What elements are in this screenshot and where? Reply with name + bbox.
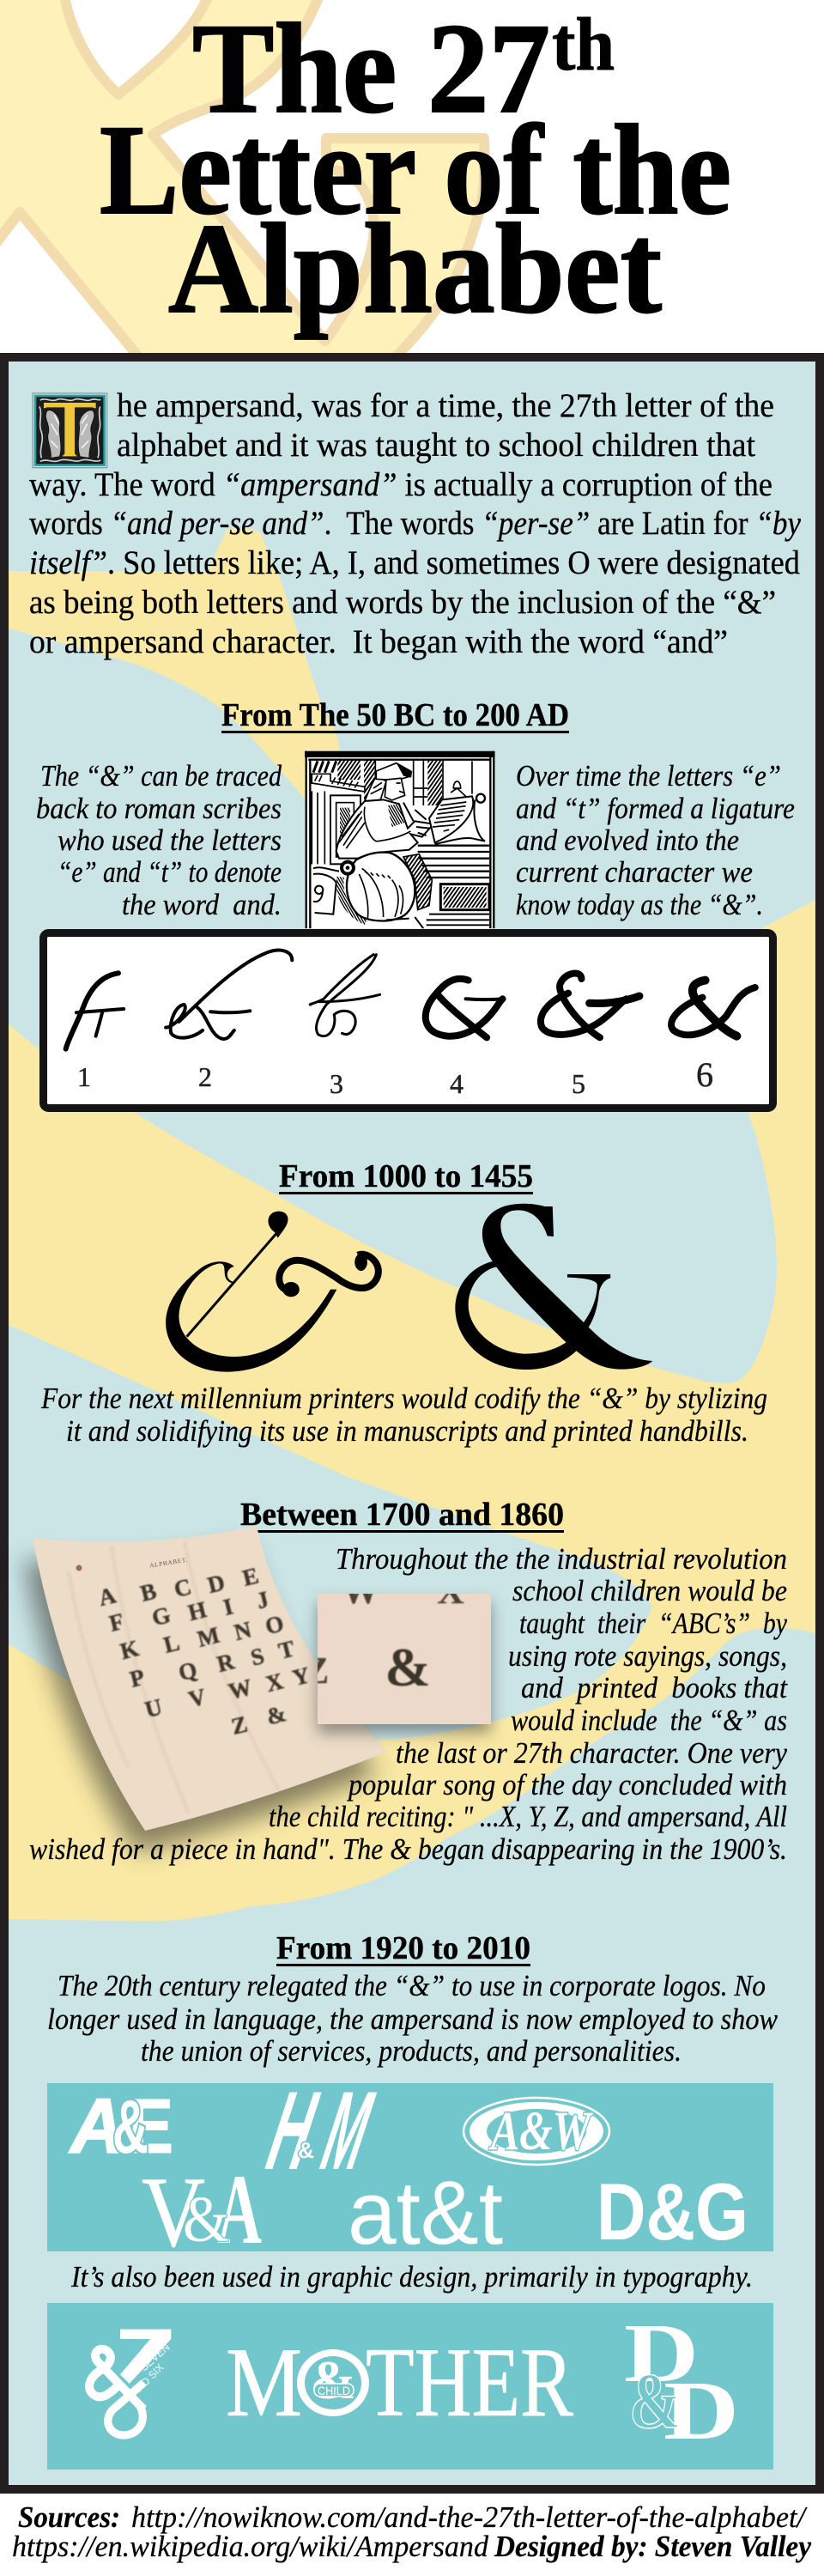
alphabet letters: E	[239, 1563, 261, 1591]
alphabet letters: S	[248, 1643, 267, 1671]
logo: Mother & Child: CHILD	[318, 2384, 350, 2397]
text: corporate logos: longer used in language, the ampersand is now employed to show	[47, 2002, 779, 2036]
glyph 4	[426, 979, 504, 1037]
alphabet letters: X	[264, 1668, 286, 1697]
text: ligature: and “t” formed a ligature	[516, 792, 795, 825]
intro paragraph: words “and per-se and”. The words “per-se” are Latin for “by	[29, 505, 802, 542]
glyph 2	[166, 951, 292, 1039]
title: th	[552, 3, 615, 87]
glyph 6	[671, 981, 755, 1036]
sources: Sources:	[18, 2500, 120, 2534]
logo: V&A	[142, 2154, 262, 2268]
logo: A&W	[464, 2098, 609, 2165]
logo: D&D: D	[624, 2307, 699, 2399]
logo: V&A: &	[183, 2184, 229, 2256]
text: roman scribes: The “&” can be traced	[40, 759, 282, 793]
intro paragraph	[29, 387, 802, 660]
intro paragraph: alphabet and it was taught to school children that	[117, 427, 755, 464]
alphabet letters: O	[263, 1610, 287, 1639]
image: alphabet sheet	[24, 1526, 387, 1852]
panel: corporate logos	[47, 2069, 773, 2268]
text: ligature: and evolved into the	[516, 823, 739, 857]
text: graphic design: It’s also been used in graphic design, primarily in typography.	[70, 2260, 753, 2293]
text: industrial revolution: and printed books that	[521, 1671, 788, 1704]
panel: typography logos	[47, 2303, 773, 2470]
logo: seven and six: SEVEN	[138, 2341, 172, 2373]
alphabet letters: J	[254, 1586, 271, 1613]
text: industrial revolution: school children would be	[512, 1574, 787, 1607]
text: ligature: Over time the letters “e”	[516, 759, 781, 793]
heading: From 1000 to 1455: From 1000 to 1455	[279, 1158, 533, 1194]
text: corporate logos: The 20th century relegated the “&” to use in corporate logos. No	[58, 1969, 766, 2002]
logo: Mother & Child: &	[310, 2349, 356, 2410]
logo: H&M: H	[253, 2069, 333, 2193]
alphabet letters: W	[226, 1674, 255, 1704]
text: industrial revolution: the last or 27th character. One very	[396, 1736, 787, 1770]
alphabet letters: V	[186, 1683, 209, 1712]
logo: Mother & Child: THER	[366, 2328, 573, 2437]
glyph numbers: 4	[450, 1068, 464, 1099]
glyph numbers: 2	[198, 1061, 212, 1092]
image: magnified ampersand inset: Z	[304, 1649, 329, 1692]
logo: D&D: &	[629, 2357, 681, 2445]
text: industrial revolution: Throughout the the industrial revolution	[336, 1542, 787, 1576]
alphabet letters: M	[195, 1622, 222, 1652]
background ampersand behind title	[0, 0, 484, 361]
glyph numbers: 1	[77, 1061, 91, 1092]
text: industrial revolution: would include the “&” as	[511, 1704, 787, 1737]
logo: D&D	[624, 2307, 739, 2457]
alphabet letters: Z	[228, 1711, 250, 1740]
logo: at&t: at&t	[348, 2163, 503, 2263]
text: corporate logos	[47, 1969, 779, 2068]
glyph 3	[310, 955, 380, 1036]
logo: V&A: V	[142, 2157, 205, 2268]
text: industrial revolution	[29, 1542, 788, 1866]
alphabet letters: N	[232, 1616, 254, 1645]
sources: Designed by: Steven Valley	[494, 2530, 811, 2563]
image: alphabet sheet: ALPHABET.	[149, 1557, 189, 1569]
alphabet letters: H	[185, 1596, 209, 1625]
logo: H&M: M	[308, 2069, 388, 2193]
icon: ornate italic ampersand	[166, 1212, 379, 1372]
heading: Between 1700 and 1860: Between 1700 and 1860	[240, 1497, 564, 1533]
sources	[12, 2500, 811, 2563]
text: roman scribes: who used the letters	[58, 823, 282, 857]
sources: https://en.wikipedia.org/wiki/Ampersand	[12, 2530, 488, 2563]
text: roman scribes	[36, 759, 282, 921]
alphabet letters: Q	[176, 1656, 200, 1686]
alphabet letters: L	[161, 1630, 182, 1658]
heading: From The 50 BC to 200 AD: From The 50 BC to 200 AD	[221, 697, 569, 733]
alphabet letters: &	[264, 1700, 288, 1730]
logo: seven and six	[89, 2330, 172, 2435]
text: ligature: know today as the “&”.	[516, 888, 763, 921]
icon: illuminated drop cap T	[33, 393, 107, 468]
title: Letter of the	[100, 99, 731, 241]
intro paragraph: way. The word “ampersand” is actually a corruption of the	[29, 466, 772, 503]
text: ligature: current character we	[516, 855, 753, 889]
text: roman scribes: “e” and “t” to denote	[58, 855, 282, 889]
alphabet letters: G	[149, 1601, 173, 1631]
glyph numbers	[77, 1055, 713, 1099]
panel: ampersand evolution box	[43, 933, 772, 1108]
logo: H&M: &	[298, 2137, 314, 2163]
glyph 5	[541, 974, 639, 1037]
text: printers codify: For the next millennium printers would codify the “&” by stylizing	[40, 1382, 767, 1415]
image: magnified ampersand inset: X	[437, 1570, 464, 1612]
logo: Mother & Child	[226, 2328, 573, 2437]
alphabet letters: K	[118, 1635, 142, 1664]
logo: V&A: A	[217, 2154, 262, 2265]
alphabet letters: F	[106, 1608, 126, 1637]
alphabet letters: T	[276, 1636, 297, 1664]
text: industrial revolution: popular song of the day concluded with	[346, 1768, 787, 1801]
glyph numbers: 5	[572, 1068, 585, 1099]
intro paragraph: he ampersand, was for a time, the 27th letter of the	[117, 387, 774, 424]
logo: D&G: D&G	[597, 2166, 748, 2257]
image: woodcut of scribe	[305, 750, 495, 929]
intro paragraph: or ampersand character. It began with the word “and”	[29, 623, 728, 660]
alphabet letters: R	[215, 1648, 237, 1677]
logo: seven and six: AND SIX	[129, 2361, 166, 2398]
image: magnified ampersand inset: W	[342, 1570, 379, 1612]
alphabet letters: A	[96, 1582, 118, 1611]
glyph numbers: 3	[330, 1068, 343, 1099]
text: roman scribes: back to roman scribes	[36, 792, 282, 825]
alphabet letters: Y	[290, 1662, 312, 1691]
logo: A&E: A	[69, 2084, 124, 2170]
panel background yellow shape upper	[9, 528, 360, 936]
text: printers codify	[40, 1382, 767, 1448]
alphabet letters: P	[127, 1664, 147, 1692]
sources: http://nowiknow.com/and-the-27th-letter-of-the-alphabet/	[131, 2500, 808, 2534]
logo: A&E: &	[112, 2084, 148, 2169]
alphabet letters: U	[142, 1693, 165, 1722]
heading: From 1920 to 2010: From 1920 to 2010	[276, 1930, 530, 1966]
text: ligature	[516, 759, 795, 921]
text: corporate logos: the union of services, products, and personalities.	[141, 2034, 682, 2068]
logo: D&D: D	[663, 2365, 739, 2457]
logo: Mother & Child: M	[226, 2328, 302, 2437]
alphabet letters: D	[205, 1569, 227, 1598]
panel background yellow swoosh	[9, 900, 815, 1921]
text: printers codify: it and solidifying its use in manuscripts and printed handbills.	[66, 1414, 748, 1448]
text: industrial revolution: using rote sayings, songs,	[508, 1639, 787, 1673]
icon: roman ampersand	[455, 1204, 652, 1370]
text: roman scribes: the word and.	[122, 888, 282, 921]
title: The 27	[192, 0, 550, 140]
image: magnified ampersand inset	[304, 1570, 491, 1733]
alphabet letters: I	[221, 1593, 236, 1620]
alphabet letters: B	[137, 1578, 159, 1607]
logo: A&E	[69, 2084, 173, 2170]
glyph numbers: 6	[696, 1055, 713, 1094]
title	[100, 0, 731, 340]
image: magnified ampersand inset: &	[385, 1637, 431, 1698]
title: Alphabet	[168, 197, 662, 340]
intro paragraph: as being both letters and words by the inclusion of the “&”	[29, 584, 776, 621]
alphabet letters	[96, 1563, 312, 1740]
logo: A&E: E	[129, 2084, 173, 2170]
glyph 1	[66, 973, 124, 1049]
alphabet letters: C	[172, 1573, 194, 1602]
logo: A&W: A&W	[488, 2100, 593, 2162]
